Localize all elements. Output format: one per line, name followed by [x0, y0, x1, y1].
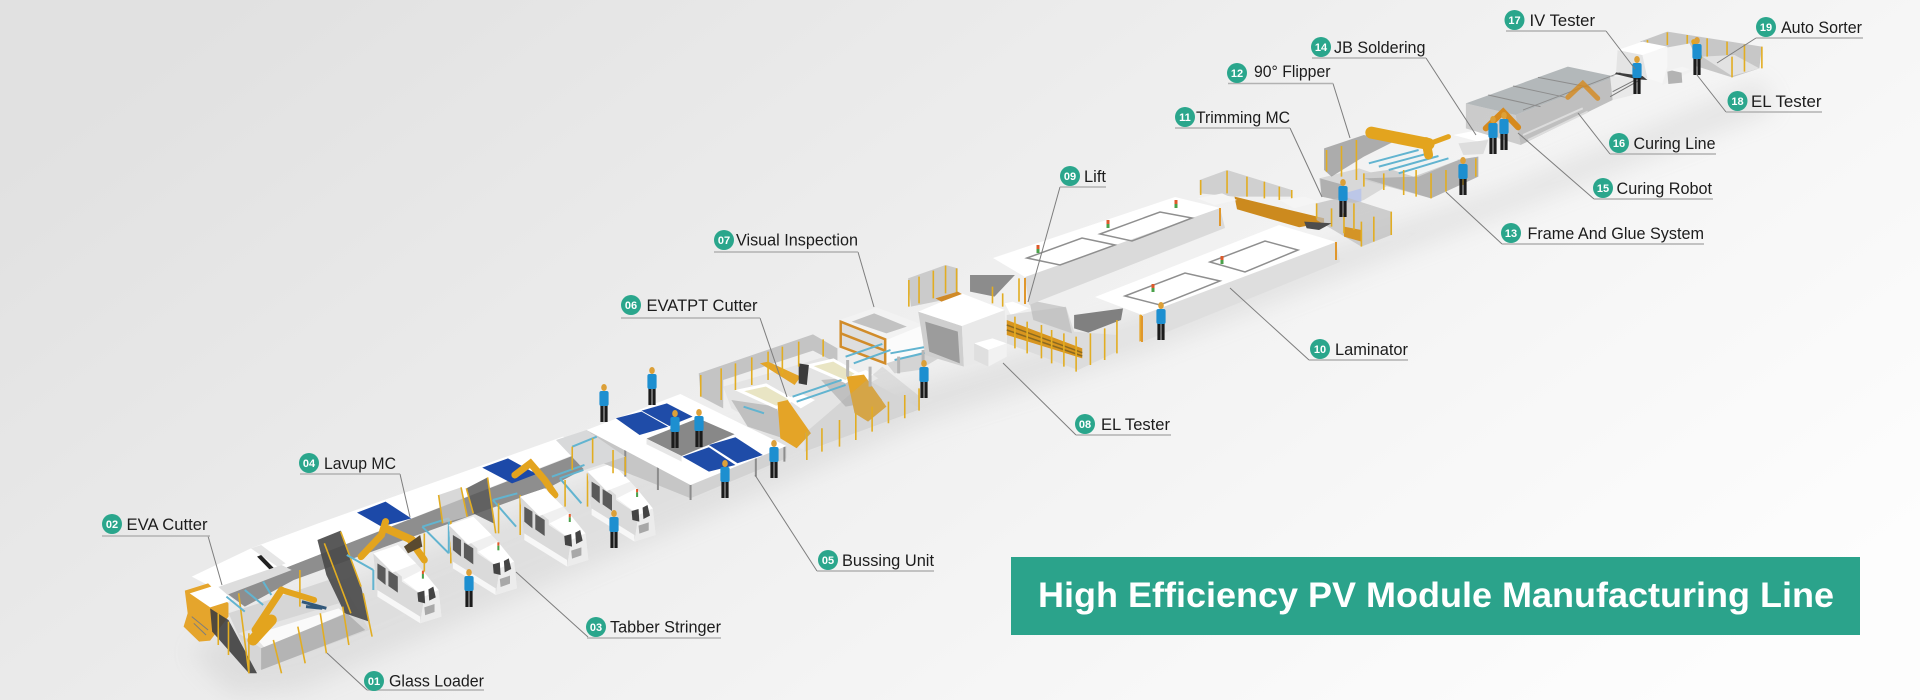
lay-up robot: [347, 463, 588, 590]
label 01 Glass Loader: 01: [368, 676, 380, 688]
title banner: High Efficiency PV Module Manufacturing Line: [1038, 576, 1834, 615]
label 06 EVATPT Cutter: 06: [625, 300, 637, 312]
production line machinery: [184, 32, 1762, 673]
label 05 Bussing Unit: Bussing Unit: [842, 551, 934, 570]
label 11 Trimming MC: 11: [1179, 112, 1191, 124]
EVA cutter conveyor strip: [192, 437, 592, 607]
label 17 IV Tester: [1504, 10, 1635, 69]
label 01 Glass Loader: Glass Loader: [389, 672, 484, 690]
label 12 90 degree Flipper: 12: [1231, 68, 1243, 80]
EVA TPT cutter: [699, 334, 920, 460]
label 07 Visual Inspection: 07: [718, 235, 730, 247]
label 12 90 degree Flipper: 90° Flipper: [1254, 62, 1331, 81]
blue panels: [357, 458, 537, 527]
label 18 EL Tester: 18: [1731, 96, 1744, 108]
label 18 EL Tester: EL Tester: [1751, 92, 1822, 111]
label 11 Trimming MC: [1175, 107, 1322, 197]
lift cage and loading racks: [908, 265, 1144, 372]
label 04 Lavup MC: Lavup MC: [324, 454, 396, 473]
label 01 Glass Loader: [327, 653, 484, 691]
label 16 Curing Line: [1578, 113, 1716, 154]
label 08 EL Tester: EL Tester: [1101, 415, 1170, 434]
label 02 EVA Cutter: 02: [106, 519, 118, 531]
label 14 JB Soldering: 14: [1315, 42, 1328, 54]
label 19 Auto Sorter: [1717, 17, 1863, 63]
label 13 Frame And Glue System: 13: [1505, 228, 1517, 240]
tabber stringer machines: [373, 463, 656, 623]
label 15 Curing Robot: Curing Robot: [1616, 179, 1712, 198]
bussing unit: [552, 394, 786, 500]
label 10 Laminator: [1230, 288, 1408, 360]
label 16 Curing Line: Curing Line: [1634, 134, 1716, 153]
glass loader: [184, 531, 372, 673]
label 18 EL Tester: [1697, 75, 1822, 112]
trimming, flipper and frame and glue area: [1197, 168, 1391, 247]
label 08 EL Tester: 08: [1079, 419, 1091, 431]
label 15 Curing Robot: [1518, 133, 1713, 199]
laminators: [993, 197, 1340, 342]
label 04 Lavup MC: [299, 453, 410, 517]
IV tester, EL tester and auto sorter: [1615, 32, 1762, 85]
label 17 IV Tester: 17: [1508, 15, 1521, 27]
label 13 Frame And Glue System: [1446, 192, 1704, 244]
label 16 Curing Line: 16: [1613, 138, 1625, 150]
workers: [464, 37, 1702, 607]
label 09 Lift: Lift: [1084, 167, 1106, 186]
EL tester box: [918, 293, 1029, 367]
visual inspection: [839, 307, 941, 387]
curing line enclosure: [1466, 67, 1642, 145]
label 08 EL Tester: [1003, 363, 1171, 435]
label 10 Laminator: 10: [1314, 344, 1326, 356]
title banner: [1011, 557, 1860, 635]
bussing blue cells: [616, 403, 763, 472]
curing robots: [1486, 83, 1598, 128]
label 02 EVA Cutter: EVA Cutter: [126, 515, 208, 534]
label 17 IV Tester: IV Tester: [1530, 11, 1595, 30]
label 11 Trimming MC: Trimming MC: [1196, 108, 1290, 127]
label 19 Auto Sorter: Auto Sorter: [1781, 18, 1862, 37]
label 03 Tabber Stringer: Tabber Stringer: [610, 618, 721, 636]
label 02 EVA Cutter: [102, 514, 222, 585]
label 10 Laminator: Laminator: [1335, 340, 1408, 359]
label 03 Tabber Stringer: 03: [590, 622, 602, 634]
label 05 Bussing Unit: [755, 475, 934, 571]
floor shadow: [190, 80, 1775, 695]
label 09 Lift: 09: [1064, 171, 1076, 183]
label 04 Lavup MC: 04: [303, 458, 316, 470]
label 07 Visual Inspection: Visual Inspection: [736, 230, 858, 250]
label 06 EVATPT Cutter: EVATPT Cutter: [646, 296, 758, 315]
label 05 Bussing Unit: 05: [822, 555, 834, 567]
label 14 JB Soldering: JB Soldering: [1334, 38, 1426, 57]
label 09 Lift: [1028, 166, 1106, 302]
label 03 Tabber Stringer: [516, 572, 721, 638]
label 14 JB Soldering: [1311, 37, 1476, 135]
label 13 Frame And Glue System: Frame And Glue System: [1528, 224, 1704, 243]
label 15 Curing Robot: 15: [1597, 183, 1609, 195]
label 12 90 degree Flipper: [1227, 62, 1350, 138]
label 06 EVATPT Cutter: [621, 295, 787, 397]
label 07 Visual Inspection: [714, 230, 874, 307]
label 19 Auto Sorter: 19: [1760, 22, 1772, 34]
